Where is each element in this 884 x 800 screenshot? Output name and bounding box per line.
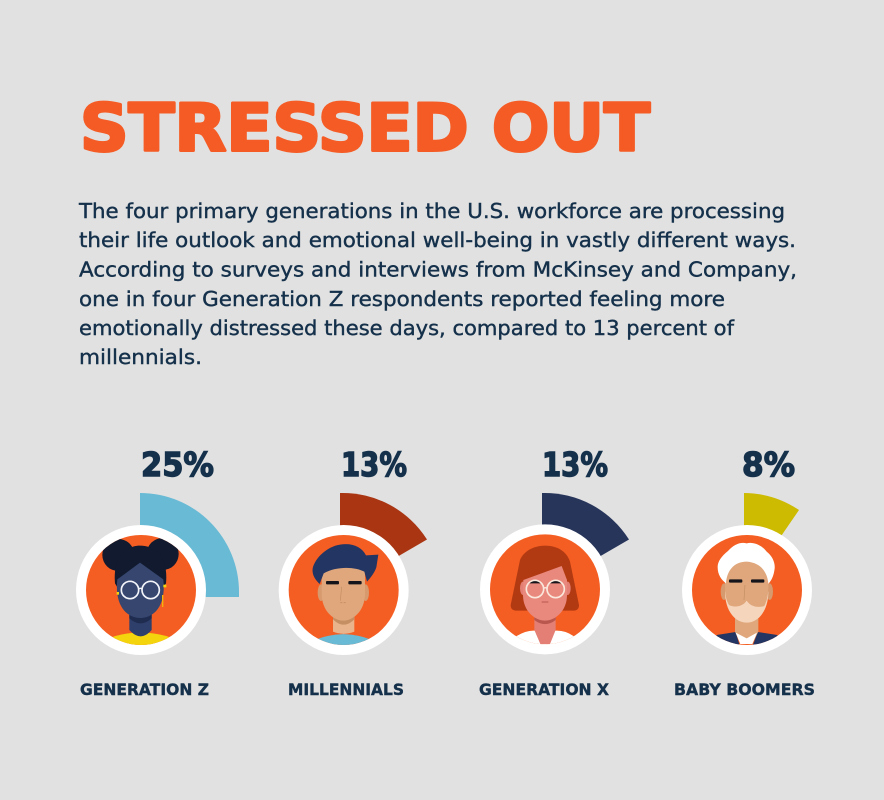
label: MILLENNIALS	[288, 680, 404, 699]
avatar: Millennials	[279, 525, 409, 655]
intro paragraph: their life outlook and emotional well-being in vastly different ways.	[79, 228, 796, 252]
percentage: 13%: 13%	[341, 445, 407, 484]
column: Millennials	[279, 445, 427, 699]
column: Generation Z	[76, 445, 239, 699]
label: GENERATION X	[479, 680, 610, 699]
intro paragraph: The four primary generations in the U.S. workforce are processing	[78, 199, 785, 223]
intro paragraph: emotionally distressed these days, compared to 13 percent of	[79, 316, 735, 340]
percentage: 8%: 8%	[742, 445, 795, 484]
title: STRESSED OUT	[80, 92, 650, 166]
wedge: 8%	[744, 493, 799, 590]
wedge: 13%	[340, 493, 427, 590]
wedge: 13%	[542, 493, 629, 590]
avatar: Generation Z	[76, 525, 206, 655]
percentage: 25%: 25%	[141, 445, 214, 484]
percentage: 13%: 13%	[542, 445, 608, 484]
column: Baby Boomers	[674, 445, 815, 699]
label: GENERATION Z	[80, 680, 209, 699]
wedge: 25%	[140, 493, 239, 597]
intro paragraph	[78, 199, 797, 369]
intro paragraph: millennials.	[79, 345, 202, 369]
avatar: Generation X	[480, 524, 610, 654]
label: BABY BOOMERS	[674, 680, 815, 699]
intro paragraph: one in four Generation Z respondents reported feeling more	[79, 287, 725, 311]
avatar: Baby Boomers	[682, 525, 812, 655]
intro paragraph: According to surveys and interviews from McKinsey and Company,	[79, 258, 797, 282]
column: Generation X	[479, 445, 629, 699]
